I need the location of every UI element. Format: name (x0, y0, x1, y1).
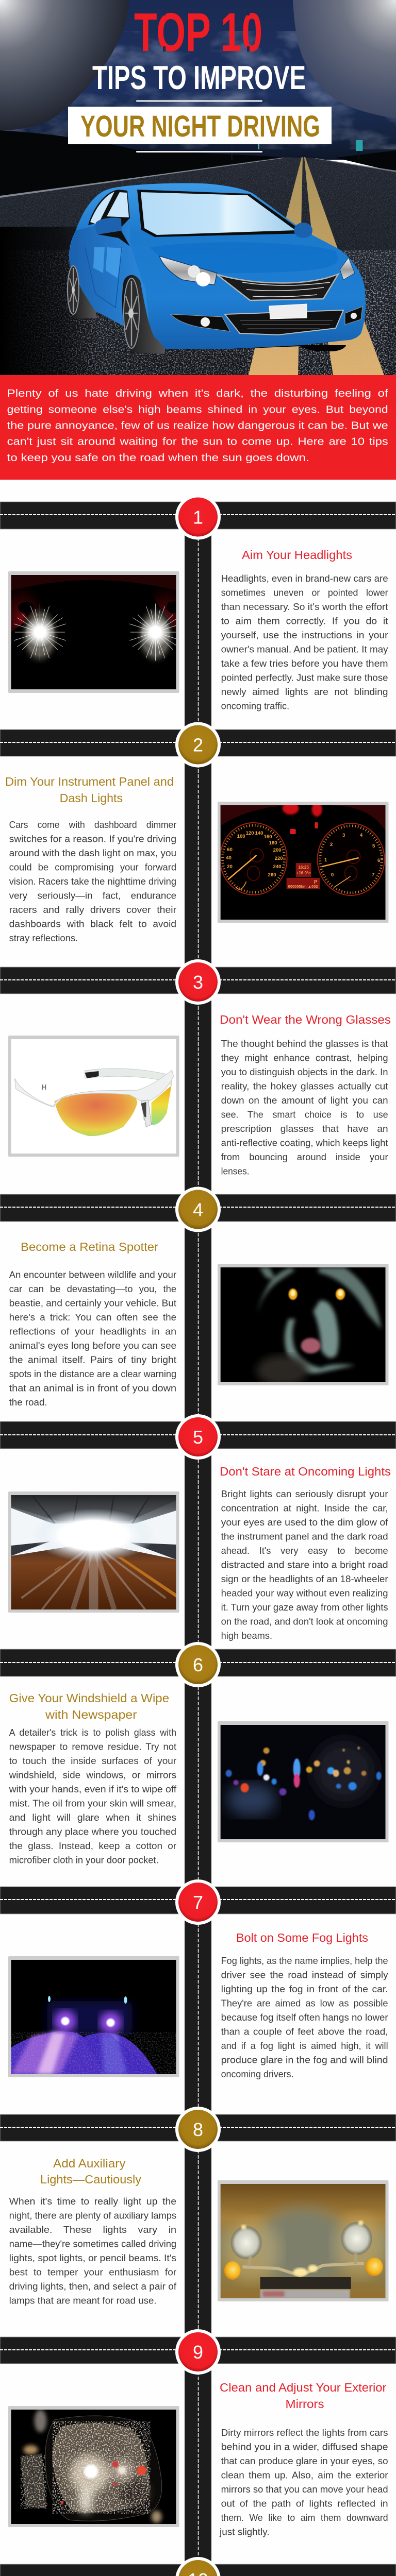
badge 3: 3 (193, 972, 203, 993)
wing mirror (95, 217, 122, 235)
tip 1 text (221, 573, 388, 711)
flash (32, 1509, 156, 1562)
tip 8 text (9, 2196, 177, 2306)
tip 8 text: lamps that are meant for road use. (9, 2295, 157, 2306)
panel: tip 9 image, wet mirror (8, 2406, 179, 2527)
badge 4: 4 (193, 1199, 203, 1220)
tip 8 text: night, there are plenty of auxiliary lamps (9, 2210, 176, 2221)
intro band (0, 375, 396, 480)
background bokeh (24, 2410, 162, 2523)
panel: tip 8 image, auxiliary lamps (218, 2180, 389, 2301)
gauge speedometer: 100 (237, 834, 245, 839)
panel: tip 7 image, purple fog lights (8, 1956, 179, 2077)
yellow line wear (248, 289, 387, 375)
asphalt road (0, 157, 396, 375)
tip 8 text: lights, spot lights, or pencil beams. It's (9, 2252, 176, 2263)
gauge speedometer: 220 (275, 856, 283, 861)
rear wheel rim (68, 266, 79, 314)
central digital displays: 000005km ▲002 (288, 884, 318, 889)
tip 9 text: clean them up. Also, aim the exterior (221, 2470, 388, 2480)
right fog lamp (345, 307, 362, 325)
front tyre (122, 275, 164, 354)
tip 3 text: they might enhance contrast, helping (221, 1052, 388, 1063)
badge 5 (175, 1414, 221, 1460)
muzzle nose (301, 1338, 321, 1353)
title: Top 10: TOP 10 (134, 2, 262, 63)
intro text: to keep you safe on the road when the sun goes down. (7, 452, 309, 464)
light bar (243, 2263, 364, 2276)
tip 3 text: lenses. (221, 1165, 250, 1177)
tip 6 heading: Give Your Windshield a Wipe (9, 1691, 169, 1705)
water droplets (53, 2421, 151, 2514)
fur bottom (257, 1355, 308, 1386)
cheek (285, 1319, 356, 1374)
tip 9 text: Dirty mirrors reflect the lights from cars (221, 2427, 388, 2438)
windshield glass (141, 192, 295, 235)
tip 5 heading: Don't Stare at Oncoming Lights (220, 1465, 391, 1478)
tip 1 heading: Aim Your Headlights (242, 548, 352, 562)
tip 6 text: mist. The oil from your skin will smear, (9, 1798, 176, 1808)
road crossing 6 (0, 1649, 396, 1676)
gauge speedometer (220, 823, 287, 895)
right lamp (342, 2221, 372, 2264)
gauge speedometer: 260 (268, 872, 276, 878)
gauge speedometer: 20 (227, 864, 233, 870)
tip 2 text: racers and rally drivers cover their (9, 904, 176, 915)
tip 2 text: could be compromising your forward (9, 861, 176, 873)
tip 6 text: with your hands, even if it's to wipe off (9, 1784, 177, 1794)
yellow side lens (152, 1086, 171, 1125)
tip 4 text: reflections of your headlights in an (9, 1326, 176, 1336)
tip 8 text: name—they're sometimes called driving (9, 2238, 176, 2249)
tip 2 text (9, 819, 176, 943)
tip 8 heading: Add Auxiliary (53, 2157, 126, 2170)
badge 2 (175, 722, 221, 768)
tip 8 heading: Lights—Cautiously (40, 2173, 141, 2186)
gauge speedometer: 140 (255, 831, 263, 836)
lower grille (225, 310, 343, 335)
tip 4 text: here's a trick: You can often see the (9, 1312, 176, 1323)
central digital displays: 16:25 (298, 865, 309, 870)
tip 6 heading: with Newspaper (45, 1708, 137, 1721)
tip 1 text: than necessary. So it's worth the effort (221, 601, 388, 612)
left headlight (159, 256, 217, 286)
intro text: can't just sit around waiting for the sun to come up. Here are 10 tips (7, 436, 388, 447)
tip 6 text: to touch the inside surfaces of your (9, 1755, 176, 1766)
tip 3 text: prescription glasses that have an (221, 1123, 388, 1134)
tip 9 heading: Mirrors (286, 2397, 324, 2411)
tip 1 text: sometimes uneven or pointed lower (221, 587, 388, 598)
badge 6 (175, 1642, 221, 1687)
tip 7 text: oncoming drivers. (221, 2069, 294, 2079)
blue car illustration (68, 183, 366, 354)
badge 8: 8 (193, 2119, 203, 2140)
tip 2 text: Cars come with dashboard dimmer (9, 819, 176, 830)
panel: tip 6 image, rainy windshield bokeh (218, 1721, 389, 1842)
tip 1 text: yourself, use the instructions in your (221, 630, 388, 640)
subtitle banner (68, 107, 332, 144)
tip 5 text: distracted and stare into a bright road (221, 1559, 388, 1570)
tip 1 text: pointed perfectly. Just make sure those (221, 672, 388, 683)
tip 9 heading: Clean and Adjust Your Exterior (220, 2381, 387, 2394)
tip 2 heading: Dash Lights (60, 791, 123, 805)
tip 5 text: Bright lights can seriously disrupt your (221, 1488, 388, 1499)
warning lamps (290, 822, 318, 834)
front wheel rim (124, 278, 139, 348)
road crossing 4 (0, 1194, 396, 1222)
tip 3 text: The thought behind the glasses is that (221, 1038, 388, 1049)
lower rule (136, 151, 262, 152)
tip 3 text: down on the amount of light you can (221, 1095, 388, 1106)
tip 5 text: the instrument panel and the dark road (221, 1531, 388, 1541)
gauge tachometer: 3 (342, 833, 345, 838)
tip 9 text: mirrors so that you can move your head (221, 2484, 388, 2495)
car body (69, 183, 366, 349)
fog beam texture (11, 2032, 176, 2074)
frame (14, 1070, 173, 1121)
reflected lights (61, 2461, 146, 2504)
upper rule (136, 100, 262, 102)
central digital displays (287, 863, 320, 889)
tip 4 text: that an animal is in front of you down (9, 1383, 176, 1393)
badge 7 (175, 1879, 221, 1925)
distant sign (232, 140, 363, 160)
tip 2 text: very seriously—in fact, endurance (9, 890, 176, 901)
intro text: getting someone else's high beams shined in your eyes. But beyond (7, 404, 388, 416)
night sky (0, 0, 396, 160)
panel: tip 5 image, oncoming glare (8, 1492, 179, 1613)
tip 4 heading: Become a Retina Spotter (21, 1240, 158, 1253)
tip 5 text: concentration at night. Inside the car, (221, 1502, 388, 1514)
tip 7 text: Fog lights, as the name implies, help the (221, 1955, 388, 1966)
tip 5 text: on the road, and don't look at oncoming (221, 1616, 388, 1627)
tip 2 text: stray reflections. (9, 933, 78, 943)
tunnel ceiling (11, 1495, 176, 1523)
tip 9 text (219, 2427, 388, 2537)
road crossing 10 (0, 2564, 396, 2576)
snout blaze (314, 1300, 339, 1358)
door highlight (93, 247, 123, 278)
gauge speedometer: 200 (273, 848, 282, 853)
tip 3 text: from bouncing around inside your (221, 1151, 388, 1162)
side windows (88, 190, 130, 227)
gauge tachometer: 7 (372, 872, 374, 878)
gauge speedometer: 120 (246, 831, 254, 836)
tip 5 text (221, 1488, 388, 1641)
lane markings (55, 1557, 176, 1597)
clouds (0, 31, 396, 149)
tip 4 text: spots in the distance are a clear warning (9, 1368, 176, 1379)
left fog lamp (171, 314, 230, 331)
tip 6 text: windshield, side windows, or mirrors (9, 1769, 176, 1781)
tip 7 text: and if a fog light is aimed high, it will (221, 2040, 388, 2051)
tip 7 text: lighting up the fog in front of the car. (221, 1984, 388, 1994)
tip 6 text: and light will glare when it shines (9, 1812, 176, 1823)
light rays on road (22, 1544, 166, 1609)
tip 7 text (221, 1955, 388, 2079)
gauge speedometer: 40 (226, 855, 232, 861)
double yellow centre line (249, 157, 384, 375)
asphalt texture (0, 157, 396, 375)
temple arm (85, 1069, 172, 1086)
badge 6: 6 (193, 1654, 203, 1675)
tip 3 text: you to distinguish objects in the dark. In (221, 1066, 388, 1077)
tip 1 text: take a few tries before you have them (221, 658, 388, 669)
upper grille (217, 274, 338, 300)
tip 6 text: microfiber cloth in your door pocket. (9, 1855, 159, 1865)
number plate (269, 304, 307, 319)
intro text: the pure annoyance, few of us realize how dangerous it can be. But we (7, 420, 388, 432)
right headlight (340, 258, 355, 280)
badge 9 (175, 2329, 221, 2375)
tip 3 text: reality, the hokey glasses actually cut (221, 1081, 388, 1091)
intro text: Plenty of us hate driving when it's dark, the disturbing feeling of (7, 388, 388, 399)
dark roadside terrain (0, 130, 396, 197)
tip 2 heading (5, 775, 174, 805)
mirror side arm (21, 2453, 46, 2509)
tip 9 text: that can produce glare in your eyes, so (221, 2455, 388, 2466)
road crossing 3 (0, 967, 396, 994)
hood sheen (150, 242, 338, 273)
mirror housing (45, 2416, 162, 2521)
marker lights (48, 1996, 127, 2004)
tip 8 text: available. These lights vary in (9, 2224, 176, 2235)
tip 8 text: best to temper your enthusiasm for (9, 2267, 176, 2277)
tip 4 text (9, 1269, 176, 1408)
title: Top 10 (134, 2, 262, 63)
rear tyre (69, 260, 96, 318)
gauge speedometer: 160 (264, 834, 272, 840)
tip 6 heading (9, 1691, 169, 1721)
subtitle: tips to improve: TIPS TO IMPROVE (92, 59, 306, 96)
tip 1 text: oncoming traffic. (221, 701, 289, 711)
underbody shadow (232, 345, 346, 351)
left lamp (232, 2225, 261, 2266)
tip 6 text: the glass. Instead, keep a cotton or (9, 1840, 176, 1851)
gauge tachometer: 2 (330, 842, 333, 848)
gauge speedometer: 180 (269, 840, 277, 846)
bar glow (293, 2265, 318, 2276)
badge 3 (175, 959, 221, 1005)
gauge tachometer (318, 823, 385, 895)
badge 9: 9 (193, 2342, 203, 2363)
road crossing 9 (0, 2337, 396, 2364)
vertical road (185, 517, 211, 2576)
tip 9 text: behind you in a wider, diffused shape (221, 2441, 388, 2452)
gauge tachometer: 5 (372, 843, 375, 849)
front lens (55, 1092, 137, 1136)
tip 3 text (221, 1038, 388, 1177)
left road shadow (0, 227, 98, 375)
tip 3 text: anti-reflective coating, which keeps light (221, 1138, 388, 1148)
badge 8 (175, 2107, 221, 2152)
gauge tachometer: 1 (324, 857, 327, 863)
fog lamps (55, 2010, 122, 2033)
tip 6 text: A detailer's trick is to polish glass with (9, 1727, 176, 1738)
tip 2 text: switches for a reason. If you're driving (9, 834, 176, 844)
tip 5 text: ahead. It's very easy to become (221, 1545, 388, 1556)
road surface (11, 1543, 176, 1609)
badge 1: 1 (193, 507, 203, 528)
windshield frame (137, 190, 305, 237)
tip 7 text: because fog itself often hangs no lower (221, 2012, 388, 2023)
gauge speedometer: 60 (227, 847, 233, 853)
tip 3 text: see. The smart choice is to use (221, 1109, 388, 1120)
head stripes (259, 1267, 382, 1329)
hero panel (0, 0, 396, 375)
tip 5 text: your eyes are used to the dim glow of (221, 1517, 388, 1528)
badge 10 (175, 2557, 221, 2576)
tip 8 heading (40, 2157, 141, 2186)
badge 7: 7 (193, 1892, 203, 1913)
tip 2 text: dashboards with black felt to avoid (9, 918, 176, 929)
tip 2 text: around with the dash light on max, you (9, 848, 176, 858)
tip 1 text: newly aimed lights are not blinding (221, 686, 388, 697)
gauge tachometer: 4 (360, 833, 363, 838)
panel: tip 4 image, raccoon eyes (218, 1264, 389, 1386)
right wing mirror (294, 223, 312, 238)
panel: tip 1 image, headlights (0, 571, 192, 693)
tip 1 text: owner's manual. And be patient. It may (221, 644, 388, 654)
left light beam (0, 0, 129, 130)
tip 5 text: sign or the headlights of an 18-wheeler (221, 1573, 388, 1584)
tip 5 text: high beams. (221, 1630, 272, 1641)
tip 6 text (9, 1727, 177, 1865)
road crossing 2 (0, 730, 396, 756)
amber indicators (224, 2258, 383, 2280)
tip 5 text: headed your way without even realizing (221, 1588, 388, 1598)
tip 7 text: driver see the road instead of simply (221, 1969, 388, 1980)
badge 1 (175, 495, 221, 540)
tip 7 heading: Bolt on Some Fog Lights (236, 1931, 368, 1944)
mirror glass (52, 2423, 149, 2513)
tip 7 text: They're are aimed as low as possible (221, 1998, 388, 2008)
tip 9 text: just slightly. (219, 2527, 270, 2537)
car side panel (69, 218, 150, 330)
tip 8 text: driving lights, then, and select a pair of (9, 2281, 177, 2292)
tip 4 text: animal's eyes long before you can see (9, 1340, 176, 1351)
road crossing 7 (0, 1887, 396, 1914)
tip 2 heading: Dim Your Instrument Panel and (5, 775, 174, 788)
tip 9 text: out of the path of lights reflected in (221, 2498, 388, 2509)
tip 8 text: When it's time to really light up the (9, 2196, 176, 2207)
tip 4 text: the road. (9, 1397, 47, 1408)
gauge tachometer: 0 (331, 872, 334, 878)
tip 4 text: An encounter between wildlife and your (9, 1269, 176, 1280)
tip 7 text: than a couple of feet above the road, (221, 2026, 388, 2037)
panel: tip 3 image, sunglasses (8, 1036, 179, 1157)
tip 1 text: Headlights, even in brand-new cars are (221, 573, 388, 584)
tip 9 heading (220, 2381, 387, 2411)
tip 3 heading: Don't Wear the Wrong Glasses (220, 1013, 391, 1026)
tip 6 text: newspaper to remove residue. Try not (9, 1741, 176, 1752)
central digital displays: P (314, 879, 318, 885)
panel: tip 2 image, instrument cluster (218, 802, 389, 923)
tip 9 text: them. We like to aim them downward (221, 2512, 388, 2523)
lower bracket (260, 2277, 351, 2289)
right light beam (293, 0, 396, 118)
road crossing 8 (0, 2114, 396, 2141)
road crossing 5 (0, 1421, 396, 1449)
glowing eyes (289, 1289, 345, 1300)
road crossing 1 (0, 502, 396, 529)
subtitle banner: YOUR NIGHT DRIVING (80, 110, 320, 143)
tip 4 text: the animal itself. Pairs of tiny bright (9, 1354, 176, 1365)
tip 2 text: vision. Racers take the nighttime driving (9, 876, 176, 887)
tip 4 text: beastie, and certainly your vehicle. But (9, 1297, 176, 1309)
road edge lines (0, 158, 396, 198)
tip 4 text: car can be devastating—to you, the (9, 1283, 176, 1294)
tip 1 text: to aim them correctly. If you do it (221, 615, 388, 626)
badge 4 (175, 1187, 221, 1232)
gauge speedometer: 240 (273, 864, 282, 870)
central digital displays: +16.0°c (296, 871, 311, 875)
badge 2: 2 (193, 735, 203, 755)
tip 6 text: through any place where you touched (9, 1826, 176, 1837)
blurred plate (260, 2290, 350, 2298)
glare haze (70, 2454, 151, 2513)
badge 5: 5 (193, 1427, 203, 1448)
tip 7 text: produce glare in the fog and will blind (221, 2055, 388, 2065)
gauge tachometer: 6 (377, 858, 380, 863)
intro text (7, 388, 388, 464)
tip 5 text: it. Turn your gaze away from other lights (221, 1602, 388, 1613)
